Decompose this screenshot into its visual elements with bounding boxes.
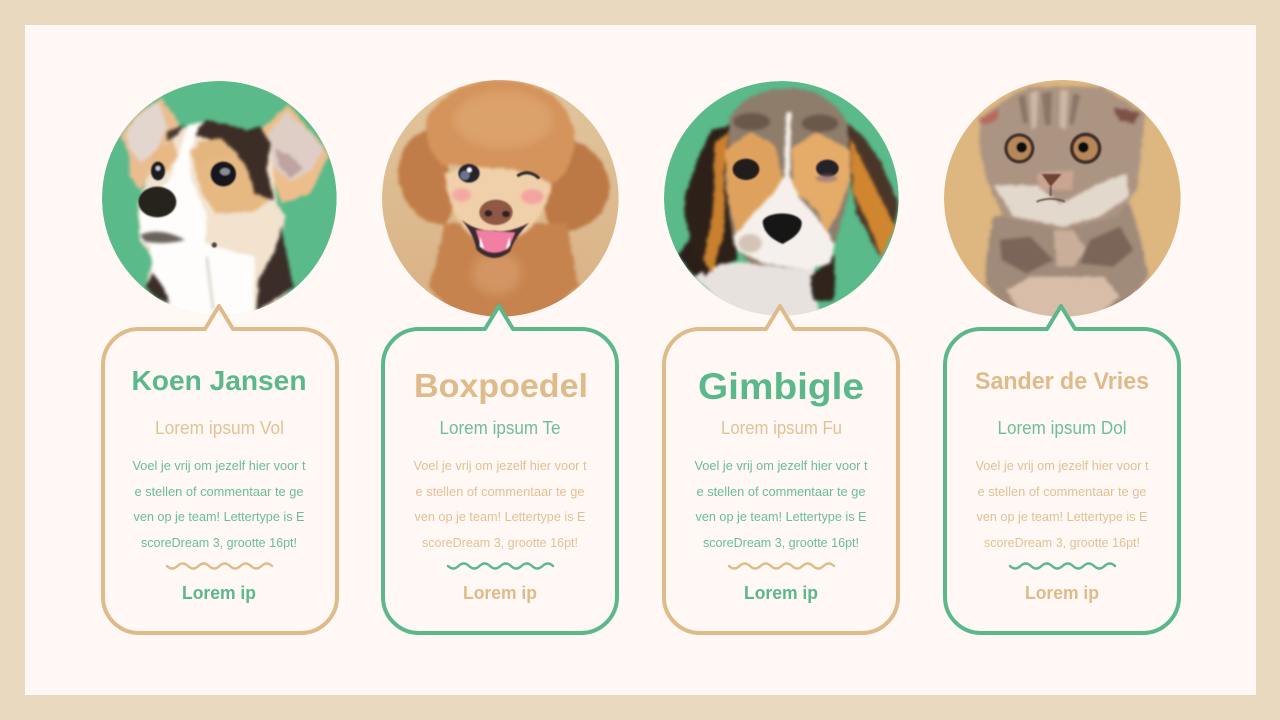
body text: ven op je team! Lettertype is E: [696, 509, 867, 524]
body text: scoreDream 3, grootte 16pt!: [984, 535, 1140, 550]
card: Koen Jansen: [103, 306, 337, 633]
wavy divider: [729, 564, 834, 568]
wavy divider: [1010, 564, 1115, 568]
body text: [414, 458, 587, 550]
speech bubble outline: [664, 306, 898, 633]
card: Gimbigle: [664, 306, 898, 633]
speech bubble outline: [383, 306, 617, 633]
body text: e stellen of commentaar te ge: [134, 484, 304, 499]
body text: scoreDream 3, grootte 16pt!: [141, 535, 297, 550]
speech bubble outline: [945, 306, 1179, 633]
body text: Voel je vrij om jezelf hier voor t: [694, 458, 868, 473]
name: Koen Jansen: [132, 365, 306, 396]
body text: [694, 458, 868, 550]
body text: Voel je vrij om jezelf hier voor t: [132, 458, 306, 473]
name: Gimbigle: [698, 366, 864, 407]
subtitle: Lorem ipsum Vol: [155, 418, 284, 438]
body text: Voel je vrij om jezelf hier voor t: [414, 458, 587, 473]
wavy divider: [448, 564, 553, 568]
footer label: Lorem ip: [182, 583, 256, 603]
body text: scoreDream 3, grootte 16pt!: [422, 535, 578, 550]
subtitle: Lorem ipsum Te: [440, 418, 560, 438]
name: Boxpoedel: [414, 367, 588, 404]
body text: [976, 458, 1149, 550]
footer label: Lorem ip: [744, 583, 818, 603]
body text: ven op je team! Lettertype is E: [976, 509, 1148, 524]
subtitle: Lorem ipsum Dol: [998, 418, 1126, 438]
photo: beagle in green circle: [664, 81, 899, 323]
photo: kitten in tan circle: [944, 80, 1181, 323]
body text: ven op je team! Lettertype is E: [134, 509, 305, 524]
name: Sander de Vries: [975, 368, 1149, 395]
body text: scoreDream 3, grootte 16pt!: [703, 535, 859, 550]
photo: poodle in tan circle: [382, 80, 619, 323]
card: Sander de Vries: [945, 306, 1179, 633]
body text: ven op je team! Lettertype is E: [414, 509, 586, 524]
photo: corgi in green circle: [102, 81, 337, 323]
body text: Voel je vrij om jezelf hier voor t: [976, 458, 1149, 473]
body text: [132, 458, 306, 550]
wavy divider: [167, 564, 272, 568]
card: Boxpoedel: [383, 306, 617, 633]
body text: e stellen of commentaar te ge: [416, 484, 584, 499]
body text: e stellen of commentaar te ge: [978, 484, 1146, 499]
speech bubble outline: [103, 306, 337, 633]
body text: e stellen of commentaar te ge: [696, 484, 866, 499]
footer label: Lorem ip: [1025, 583, 1099, 603]
footer label: Lorem ip: [463, 583, 537, 603]
subtitle: Lorem ipsum Fu: [721, 418, 842, 438]
